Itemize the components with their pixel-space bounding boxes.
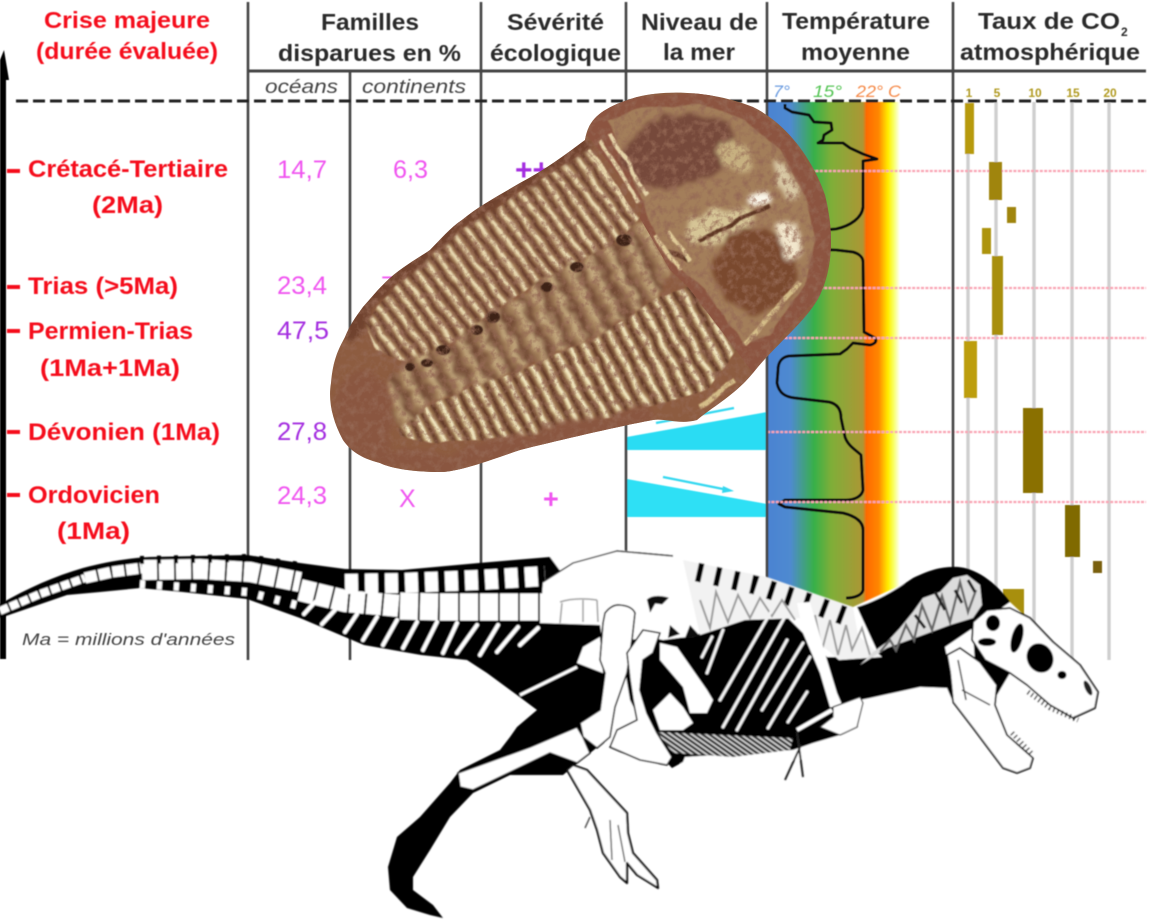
heading: niveau de la mer: Niveau de xyxy=(641,9,758,35)
temperature scale xyxy=(773,82,902,101)
far tibia xyxy=(458,727,590,790)
heading: taux de CO2: 2 xyxy=(1121,25,1128,39)
fossil texture xyxy=(320,85,845,480)
tail dark spines xyxy=(140,558,300,566)
row: Crétacé-Tertiaire xyxy=(28,154,550,219)
CO2 scale labels: 1 xyxy=(966,86,973,100)
lower pleural lobe xyxy=(400,287,736,443)
pelvis xyxy=(540,551,700,640)
row: Trias xyxy=(28,272,395,300)
heading: niveau de la mer xyxy=(641,9,758,65)
reference dotted lines xyxy=(767,171,1146,502)
skull and lower jaw xyxy=(947,608,1098,773)
row: Permien-Trias: (1Ma+1Ma) xyxy=(40,355,180,382)
pubis xyxy=(660,643,713,713)
row: Ordovicien xyxy=(28,482,559,545)
cephalon xyxy=(587,93,833,408)
CO2 scale labels: 20 xyxy=(1103,86,1117,100)
CO2 scale lines xyxy=(968,102,1109,660)
panel: temperature gradient xyxy=(768,102,900,612)
heading: température moyenne: moyenne xyxy=(801,39,910,65)
CO2 scale labels: 5 xyxy=(994,86,1001,100)
upper pleural lobe xyxy=(363,150,640,363)
heading: température moyenne xyxy=(782,8,930,65)
row: Trias: 7 xyxy=(381,272,395,300)
row: Dévonien xyxy=(28,418,327,446)
dorsal vertebrae xyxy=(683,560,882,660)
row: Crétacé-Tertiaire: 14,7 xyxy=(277,156,327,184)
row: Trias: Trias (>5Ma) xyxy=(28,273,178,300)
axis dark notches xyxy=(405,234,632,371)
heading: crise majeure: (durée évaluée) xyxy=(36,38,218,64)
row: Ordovicien: Ordovicien xyxy=(28,482,160,509)
temperature scale: 15° xyxy=(813,82,842,101)
toe details xyxy=(585,817,625,862)
chart table xyxy=(0,2,1146,660)
row: Permien-Trias: 47,5 xyxy=(277,317,329,345)
row: Crétacé-Tertiaire: (2Ma) xyxy=(92,192,163,219)
row: Ordovicien: X xyxy=(399,485,416,513)
heading: crise majeure xyxy=(36,7,218,64)
illustration: trilobite fossil xyxy=(320,85,845,480)
row: Crétacé-Tertiaire: 6,3 xyxy=(393,156,428,184)
subheading: continents: continents xyxy=(362,77,467,98)
heading: taux de CO2 xyxy=(960,8,1140,65)
row: Crétacé-Tertiaire: Crétacé-Tertiaire xyxy=(28,156,228,183)
row: Ordovicien: + xyxy=(543,484,559,514)
panel: sea level shapes xyxy=(627,408,767,517)
heading: température moyenne: Température xyxy=(782,8,930,34)
ischium xyxy=(610,630,672,765)
heading: familles disparues: disparues en % xyxy=(278,40,461,66)
neck vertebrae xyxy=(860,575,982,665)
heading: familles disparues: Familles xyxy=(321,9,419,35)
row: Ordovicien: 24,3 xyxy=(277,482,327,510)
temperature scale: 7° xyxy=(773,82,790,101)
table rules xyxy=(16,2,1146,660)
illustration: dinosaur skeleton xyxy=(0,550,1098,918)
row: Trias: 23,4 xyxy=(277,272,327,300)
CO2 scale labels: 15 xyxy=(1066,86,1080,100)
subheading: océans: océans xyxy=(265,77,339,98)
ribs xyxy=(702,610,810,730)
CO2 scale labels: 10 xyxy=(1028,86,1042,100)
tail end and rim xyxy=(332,140,653,466)
hatching: gastralia xyxy=(657,732,793,757)
heading: taux de CO2: Taux de CO xyxy=(978,8,1120,34)
heading: taux de CO2: atmosphérique xyxy=(960,39,1140,65)
heading: crise majeure: Crise majeure xyxy=(44,7,210,33)
body white mask xyxy=(540,550,1098,773)
tail and far leg xyxy=(0,555,612,918)
temperature scale: 22° C xyxy=(855,82,902,101)
temperature curve xyxy=(777,104,877,598)
central axis xyxy=(378,218,670,427)
heading: niveau de la mer: la mer xyxy=(663,39,735,65)
row: Permien-Trias xyxy=(28,317,329,382)
heading: familles disparues xyxy=(278,9,461,66)
body black mass xyxy=(620,567,1010,768)
tail vertebrae xyxy=(0,568,577,695)
CO2 bars xyxy=(964,103,1102,621)
heading: sévérité écologique: Sévérité xyxy=(507,9,604,35)
heading: sévérité écologique: écologique xyxy=(490,40,621,66)
femur xyxy=(580,605,635,748)
tick marks xyxy=(7,169,20,497)
footnote: Ma = millions d'années xyxy=(22,630,236,649)
scapula and arm xyxy=(785,602,863,780)
time arrow xyxy=(0,50,9,659)
row: Dévonien: 27,8 xyxy=(277,418,327,446)
row: Crétacé-Tertiaire: ++ xyxy=(515,154,550,187)
row: Permien-Trias: Permien-Trias xyxy=(28,318,193,345)
ribs and axis xyxy=(363,150,736,443)
heading: sévérité écologique xyxy=(490,9,621,66)
row: Ordovicien: (1Ma) xyxy=(57,518,130,545)
leg bones xyxy=(458,605,713,888)
trilobite base xyxy=(320,85,845,480)
row: Dévonien: Dévonien (1Ma) xyxy=(28,419,220,446)
CO2 scale labels xyxy=(966,86,1117,100)
foot xyxy=(567,765,658,888)
pelvic blob xyxy=(653,693,693,730)
